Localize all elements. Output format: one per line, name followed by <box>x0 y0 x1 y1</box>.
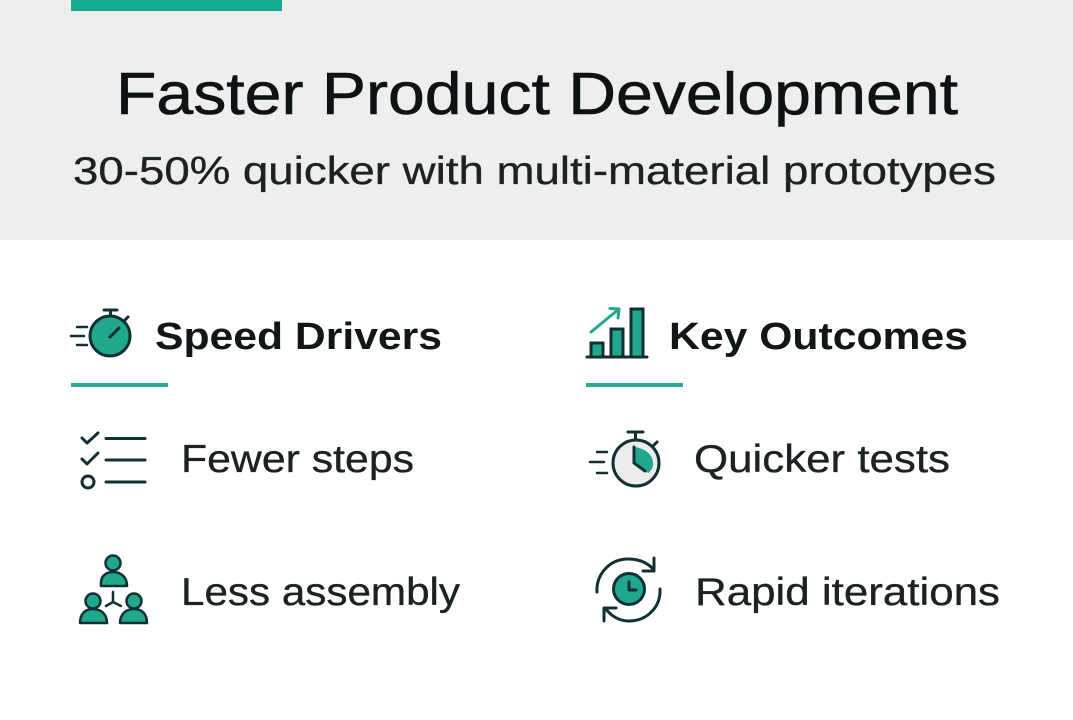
heading: speed drivers: Speed Drivers <box>155 316 442 358</box>
icon: stopwatch with speed lines <box>71 310 130 356</box>
heading underline <box>586 383 683 387</box>
text: less assembly: Less assembly <box>181 571 461 614</box>
text: quicker tests: Quicker tests <box>694 438 950 481</box>
panel: key outcomes <box>586 308 1000 621</box>
icon: stopwatch with wedge <box>590 432 659 486</box>
title: Faster Product Development <box>116 61 958 127</box>
text: rapid iterations: Rapid iterations <box>695 571 1000 614</box>
icon: checklist <box>82 433 145 488</box>
icon: team of people <box>80 556 147 623</box>
subtitle: 30-50% quicker with multi-material prototypes <box>73 150 996 193</box>
heading underline <box>71 383 168 387</box>
heading: key outcomes: Key Outcomes <box>669 316 968 358</box>
panel: speed drivers <box>71 310 461 623</box>
icon: bar chart with arrow <box>587 308 647 357</box>
icon: clock with cycle arrows <box>597 558 660 621</box>
header band <box>0 0 1073 240</box>
text: fewer steps: Fewer steps <box>181 438 414 481</box>
accent bar <box>71 0 282 11</box>
